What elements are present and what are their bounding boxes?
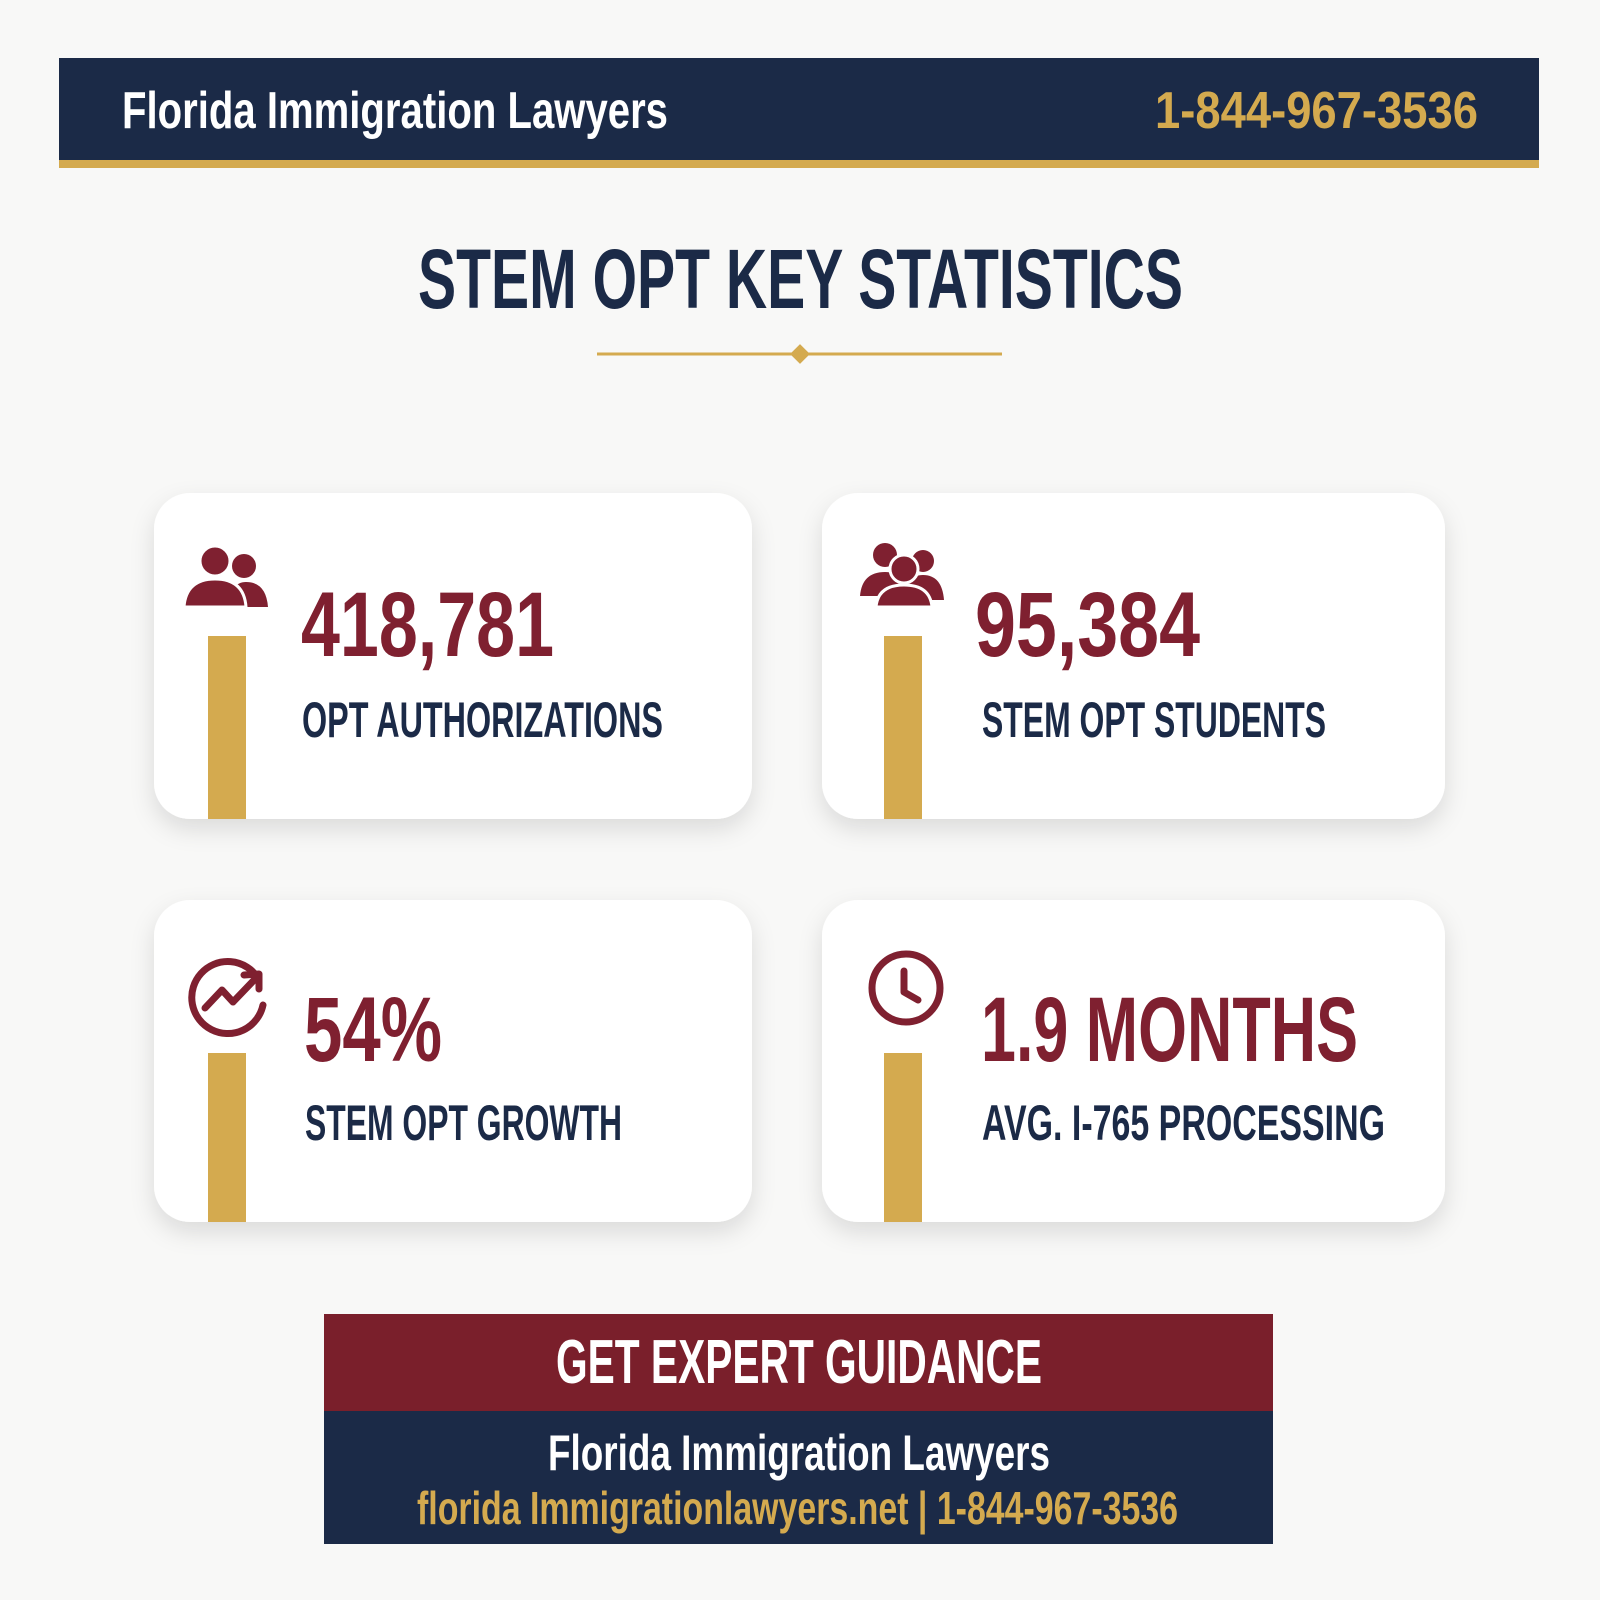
gold bar — [208, 1053, 246, 1222]
number: 54% — [304, 979, 442, 1081]
header firm name: Florida Immigration Lawyers — [122, 82, 668, 140]
card: STEM OPT growth — [154, 900, 752, 1222]
gold bar — [208, 636, 246, 819]
header bar — [59, 58, 1539, 168]
gold bar — [884, 636, 922, 819]
card: OPT authorizations — [154, 493, 752, 819]
card: processing time — [822, 900, 1445, 1222]
icon: people — [184, 546, 268, 607]
CTA heading: GET EXPERT GUIDANCE — [556, 1328, 1042, 1397]
label: STEM OPT GROWTH — [305, 1095, 622, 1151]
number: 95,384 — [975, 574, 1200, 676]
label: STEM OPT STUDENTS — [982, 692, 1326, 748]
header phone: 1-844-967-3536 — [1155, 82, 1478, 140]
number: 418,781 — [301, 574, 554, 676]
label: AVG. I-765 PROCESSING — [982, 1095, 1385, 1151]
icon: group — [860, 543, 944, 607]
title divider — [597, 344, 1002, 364]
number: 1.9 MONTHS — [981, 979, 1358, 1081]
card: STEM OPT students — [822, 493, 1445, 819]
title: STEM OPT KEY STATISTICS — [418, 232, 1183, 326]
CTA firm name: Florida Immigration Lawyers — [548, 1425, 1050, 1481]
CTA box — [324, 1314, 1273, 1544]
gold bar — [884, 1053, 922, 1222]
icon: clock — [872, 954, 940, 1022]
CTA contact: florida Immigrationlawyers.net | 1-844-967-3536 — [417, 1482, 1178, 1534]
label: OPT AUTHORIZATIONS — [302, 692, 663, 748]
icon: growth chart — [192, 962, 263, 1034]
